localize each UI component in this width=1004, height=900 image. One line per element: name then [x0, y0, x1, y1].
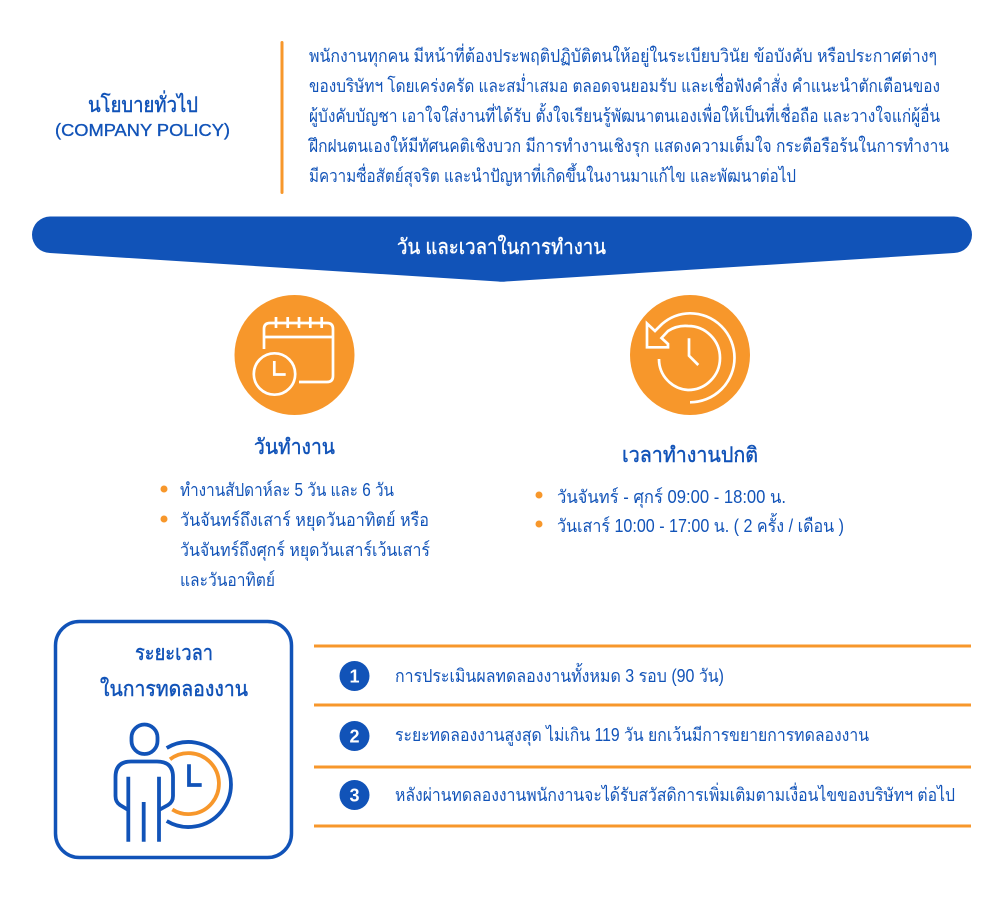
heading: company policy: (COMPANY POLICY) — [55, 120, 230, 140]
rule: list top — [314, 644, 971, 648]
text block: policy paragraph: มีความซื่อสัตย์สุจริต และนำปัญหาที่เกิดขึ้นในงานมาแก้ไข และพัฒนาต่อไป — [309, 163, 796, 187]
panel heading: probation period: ในการทดลองงาน — [100, 677, 248, 701]
banner: working days and hours — [32, 216, 972, 282]
banner: working days and hours: วัน และเวลาในการทำงาน — [397, 235, 606, 259]
icon: calendar with clock — [234, 295, 354, 415]
icon: person with clock — [116, 724, 231, 842]
list: working hours: วันจันทร์ - ศุกร์ 09:00 - 18:00 น. — [557, 487, 786, 508]
list: working days: วันจันทร์ถึงเสาร์ หยุดวันอาทิตย์ หรือ — [180, 510, 429, 531]
list: working hours: วันเสาร์ 10:00 - 17:00 น. ( 2 ครั้ง / เดือน ) — [557, 513, 844, 536]
list item 2 — [340, 721, 869, 751]
list item 1 — [340, 661, 724, 691]
text block: policy paragraph — [308, 43, 949, 187]
panel heading: probation period — [100, 642, 248, 701]
list item 2: ระยะทดลองงานสูงสุด ไม่เกิน 119 วัน ยกเว้นมีการขยายการทดลองงาน — [395, 724, 869, 746]
panel: probation period — [56, 622, 292, 858]
icon: clock with history arrow — [630, 295, 750, 415]
list item 3 — [340, 780, 955, 810]
rule: item 2 — [314, 766, 971, 768]
list item 1: การประเมินผลทดลองงานทั้งหมด 3 รอบ (90 วัน) — [395, 663, 724, 686]
list: working days — [160, 480, 430, 590]
heading: working days: วันทำงาน — [254, 436, 335, 459]
list: working hours — [536, 487, 844, 536]
heading: normal working hours: เวลาทำงานปกติ — [622, 444, 758, 467]
divider: orange vertical bar — [280, 41, 284, 194]
text block: policy paragraph: พนักงานทุกคน มีหน้าที่ต้องประพฤติปฏิบัติตนให้อยู่ในระเบียบวินัย ข้อบังคับ หรือประกาศต่างๆ — [309, 43, 937, 67]
rule: list bottom — [314, 824, 971, 828]
list: working days: ทำงานสัปดาห์ละ 5 วัน และ 6 วัน — [180, 480, 394, 500]
list item 3: 3 — [349, 786, 360, 806]
heading: company policy — [55, 90, 230, 140]
rule: item 1 — [314, 704, 971, 706]
list item 1: 1 — [349, 666, 360, 686]
list: working days: วันจันทร์ถึงศุกร์ หยุดวันเสาร์เว้นเสาร์ — [180, 540, 430, 561]
panel heading: probation period: ระยะเวลา — [135, 642, 213, 665]
list: working days: และวันอาทิตย์ — [180, 570, 275, 590]
list item 2: 2 — [349, 726, 360, 746]
heading: company policy: นโยบายทั่วไป — [88, 90, 198, 117]
